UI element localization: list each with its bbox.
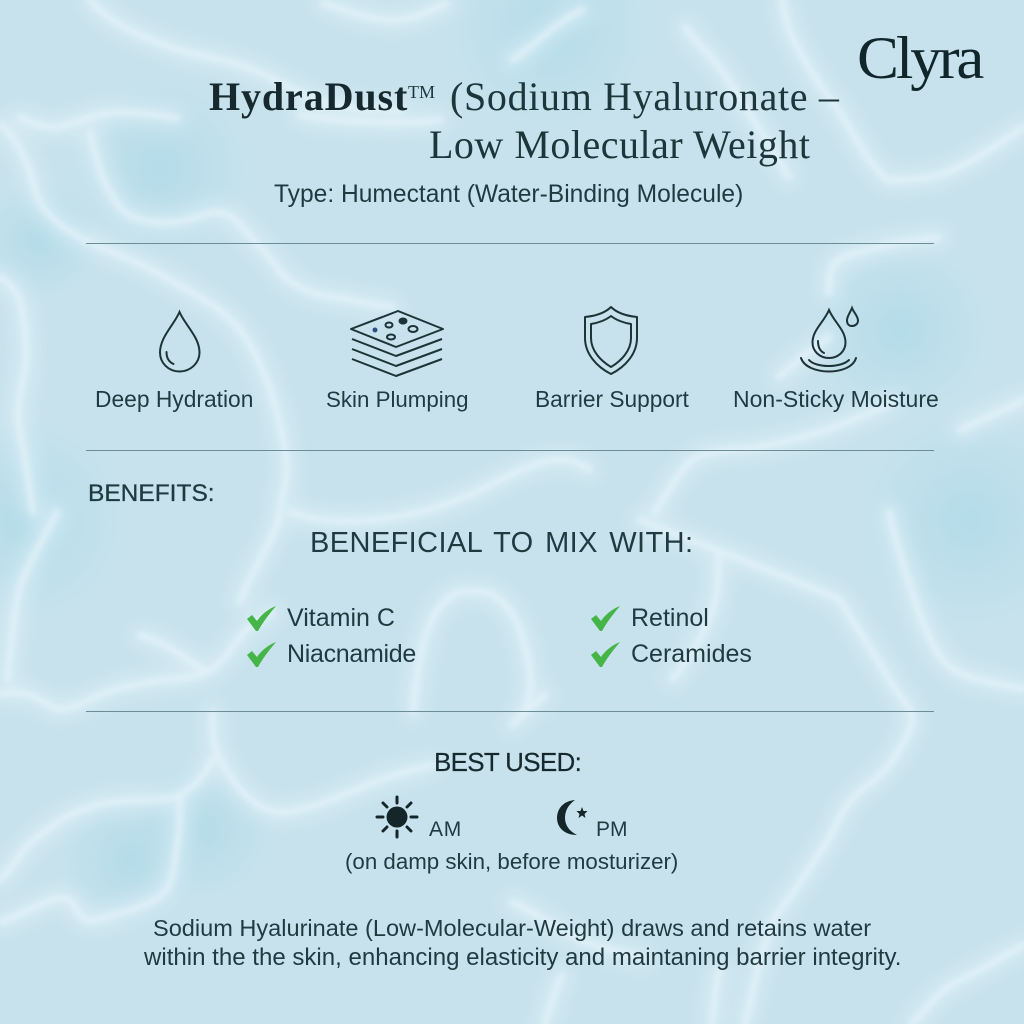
item: retinol bbox=[591, 604, 709, 632]
icon: shield bbox=[584, 306, 638, 375]
title: Low Molecular Weight bbox=[429, 122, 811, 166]
icon: skin layers bbox=[350, 310, 444, 377]
title: TM bbox=[408, 82, 435, 102]
icon: drop with ripple bbox=[800, 305, 859, 372]
icon: sun bbox=[376, 796, 418, 838]
item: ceramides: Ceramides bbox=[631, 640, 752, 668]
title bbox=[209, 74, 840, 166]
title: (Sodium Hyaluronate – bbox=[450, 74, 840, 118]
label: skin plumping: Skin Plumping bbox=[326, 386, 469, 412]
description: Sodium Hyalurinate (Low-Molecular-Weight) draws and retains water bbox=[153, 915, 871, 941]
label: deep hydration: Deep Hydration bbox=[95, 386, 253, 412]
label: non-sticky moisture: Non-Sticky Moisture bbox=[733, 386, 939, 412]
description bbox=[144, 915, 901, 971]
icon: moon and star bbox=[557, 800, 588, 835]
title: HydraDust bbox=[209, 74, 408, 118]
icon row bbox=[95, 305, 939, 412]
label: am: AM bbox=[429, 818, 462, 841]
subtitle: type: Type: Humectant (Water-Binding Molecule) bbox=[274, 181, 743, 208]
item: niacnamide: Niacnamide bbox=[287, 640, 416, 668]
heading: best used: BEST USED: bbox=[434, 747, 581, 777]
usage note: (on damp skin, before mosturizer) bbox=[345, 849, 678, 874]
description: within the the skin, enhancing elasticity and maintaning barrier integrity. bbox=[144, 944, 901, 971]
item: retinol: Retinol bbox=[631, 604, 709, 632]
logo: Clyra: Clyra bbox=[857, 25, 981, 91]
heading: beneficial to mix with: BENEFICIAL TO MIX WITH: bbox=[310, 527, 693, 559]
icon: water drop bbox=[159, 310, 200, 372]
heading: benefits: BENEFITS: bbox=[88, 480, 215, 507]
item: vitamin c: Vitamin C bbox=[287, 604, 395, 632]
label: barrier support: Barrier Support bbox=[535, 386, 689, 412]
label: pm: PM bbox=[596, 818, 628, 841]
checklist bbox=[247, 604, 752, 668]
